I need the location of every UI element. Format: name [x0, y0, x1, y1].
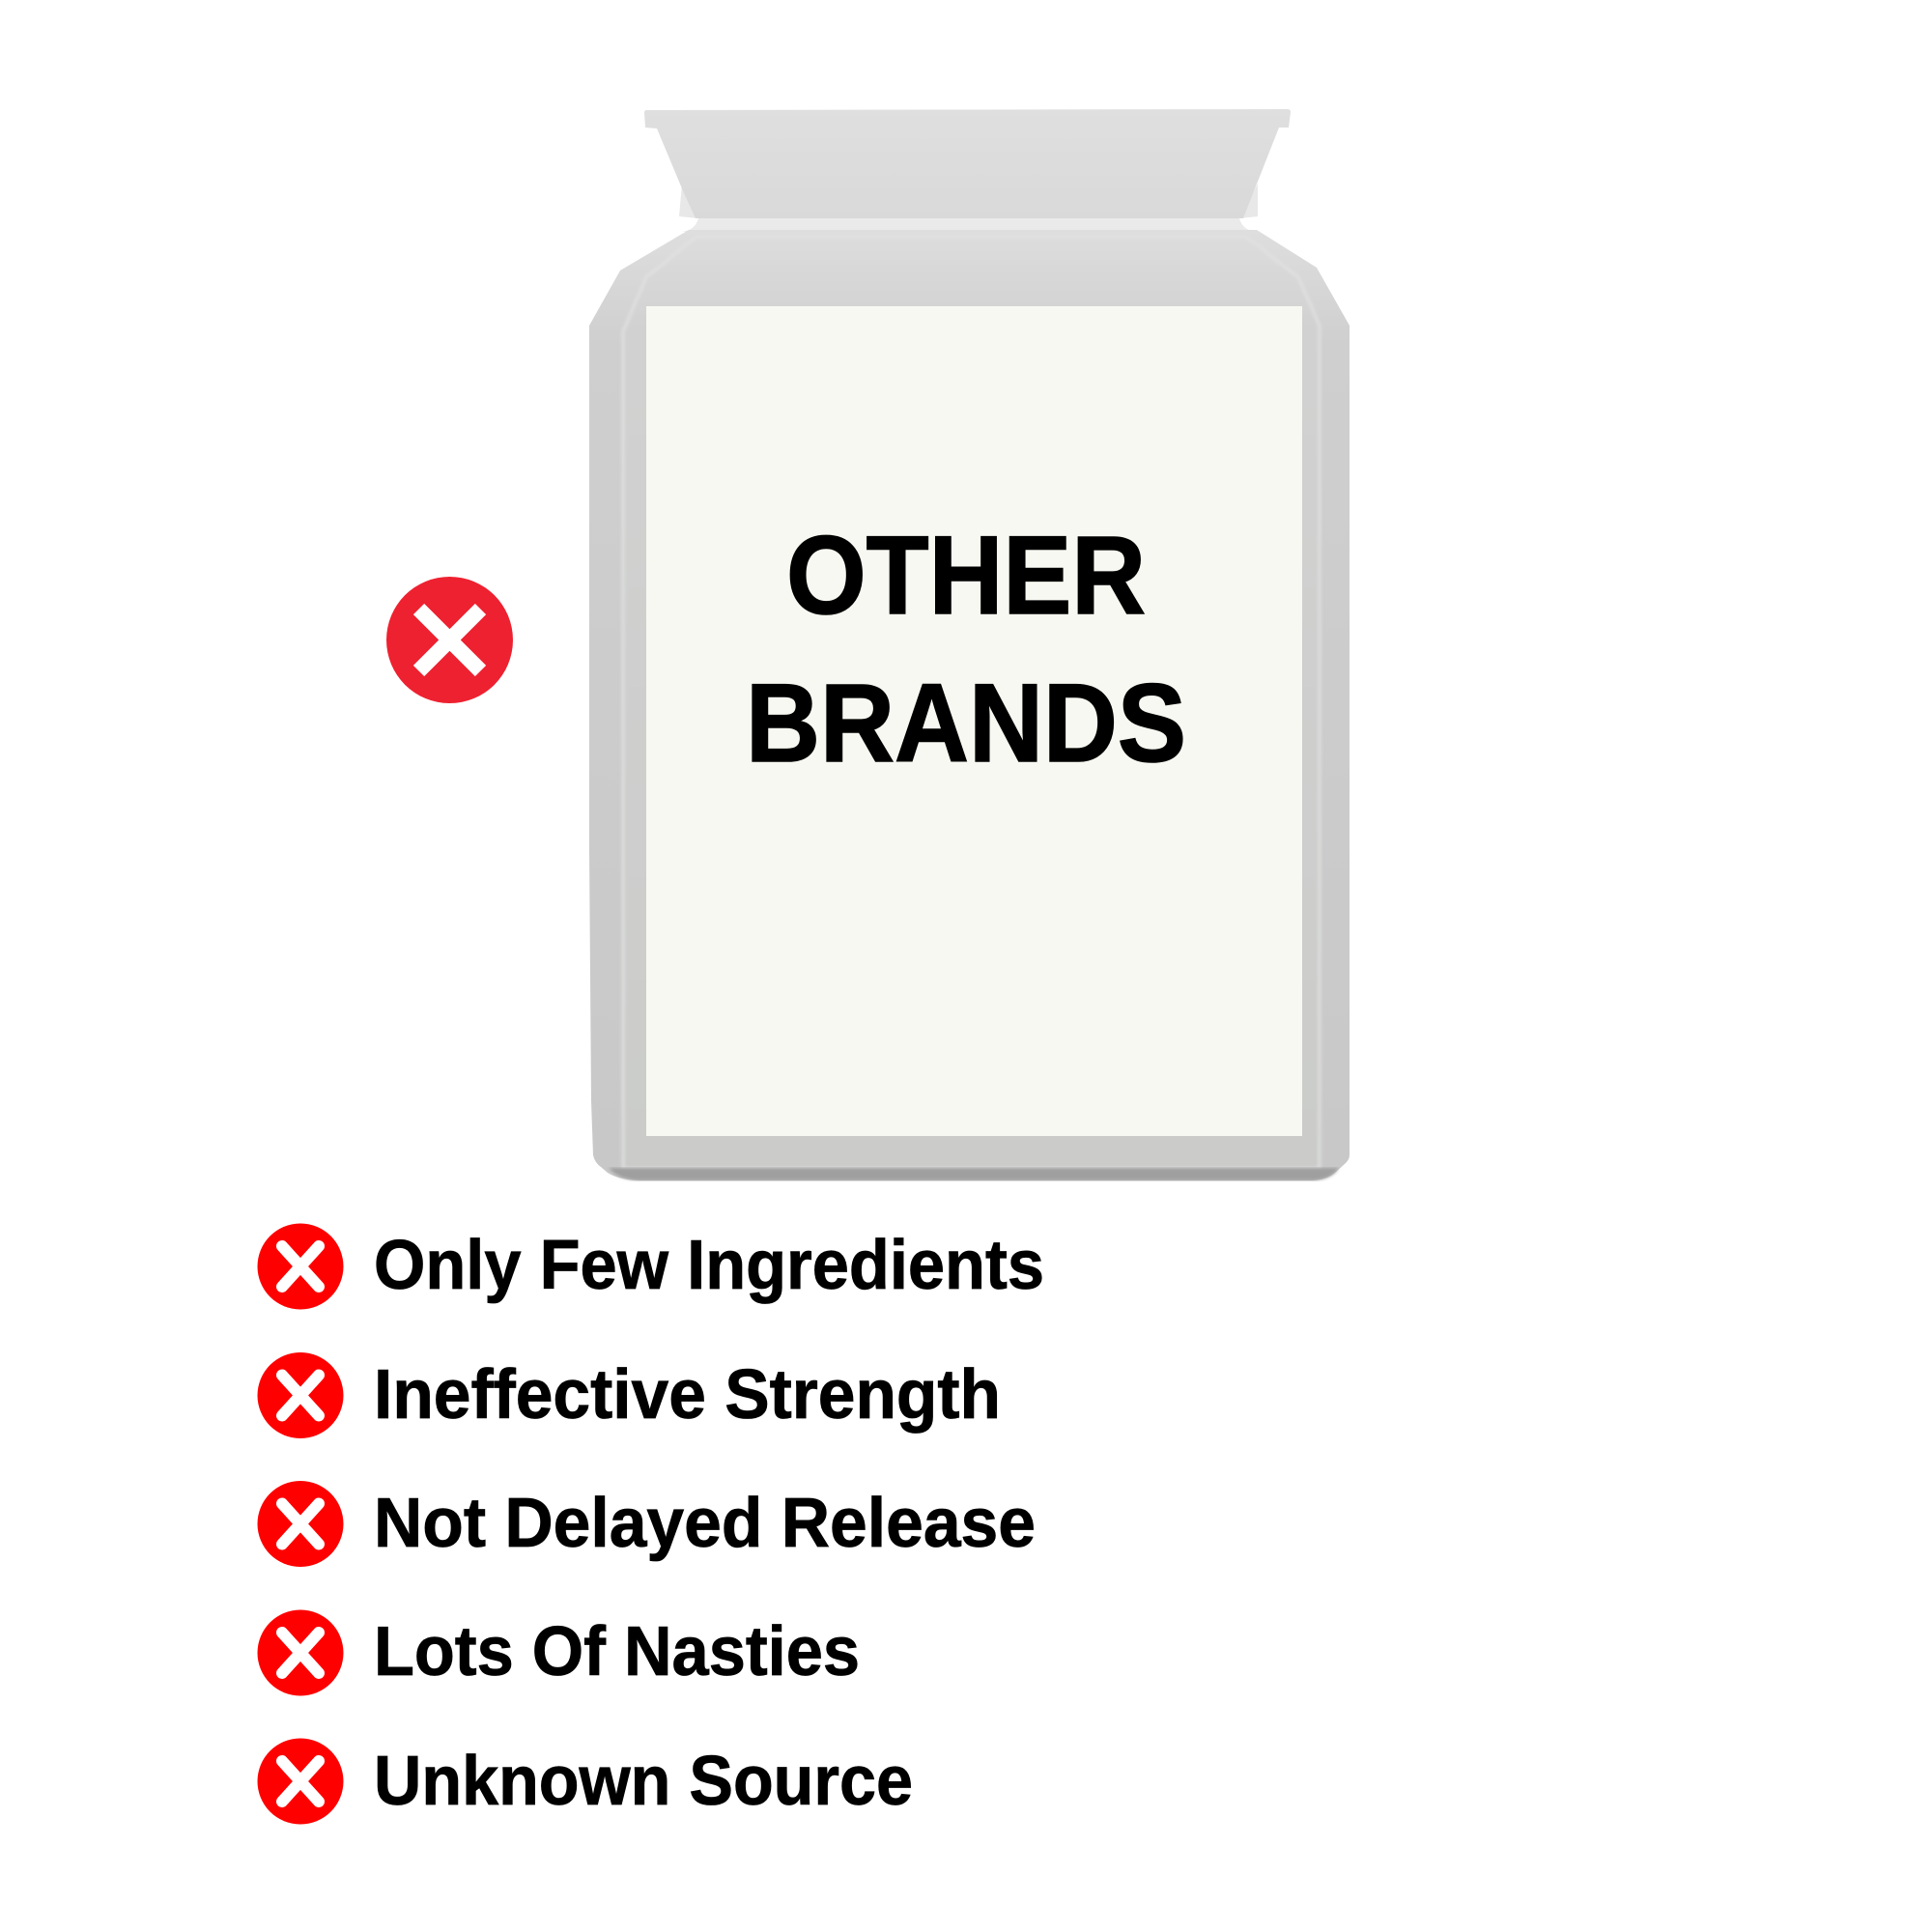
bottle shoulder and front face: [623, 237, 1320, 1169]
item: only few ingredients: Only Few Ingredients: [374, 1227, 1044, 1304]
bottle cap side tabs: [679, 184, 1258, 218]
label text: OTHER: [786, 514, 1146, 638]
label text: [746, 514, 1186, 785]
bottle body: [589, 230, 1350, 1180]
label text: BRANDS: [746, 662, 1186, 785]
item: unknown source: Unknown Source: [374, 1743, 913, 1820]
list: shortcomings: [257, 1223, 1044, 1824]
bottle neck: [682, 214, 1256, 232]
item: lots of nasties: Lots Of Nasties: [374, 1613, 860, 1690]
icon: large red cross: [386, 577, 513, 703]
bottle cap: [644, 109, 1291, 218]
item: not delayed release: Not Delayed Release: [374, 1485, 1036, 1562]
bottle label: [646, 306, 1302, 1136]
item: lots of nasties: [257, 1609, 860, 1696]
bottle base shadow: [609, 1168, 1339, 1180]
bottle: [589, 109, 1350, 1180]
item: ineffective strength: Ineffective Strength: [374, 1356, 1001, 1434]
